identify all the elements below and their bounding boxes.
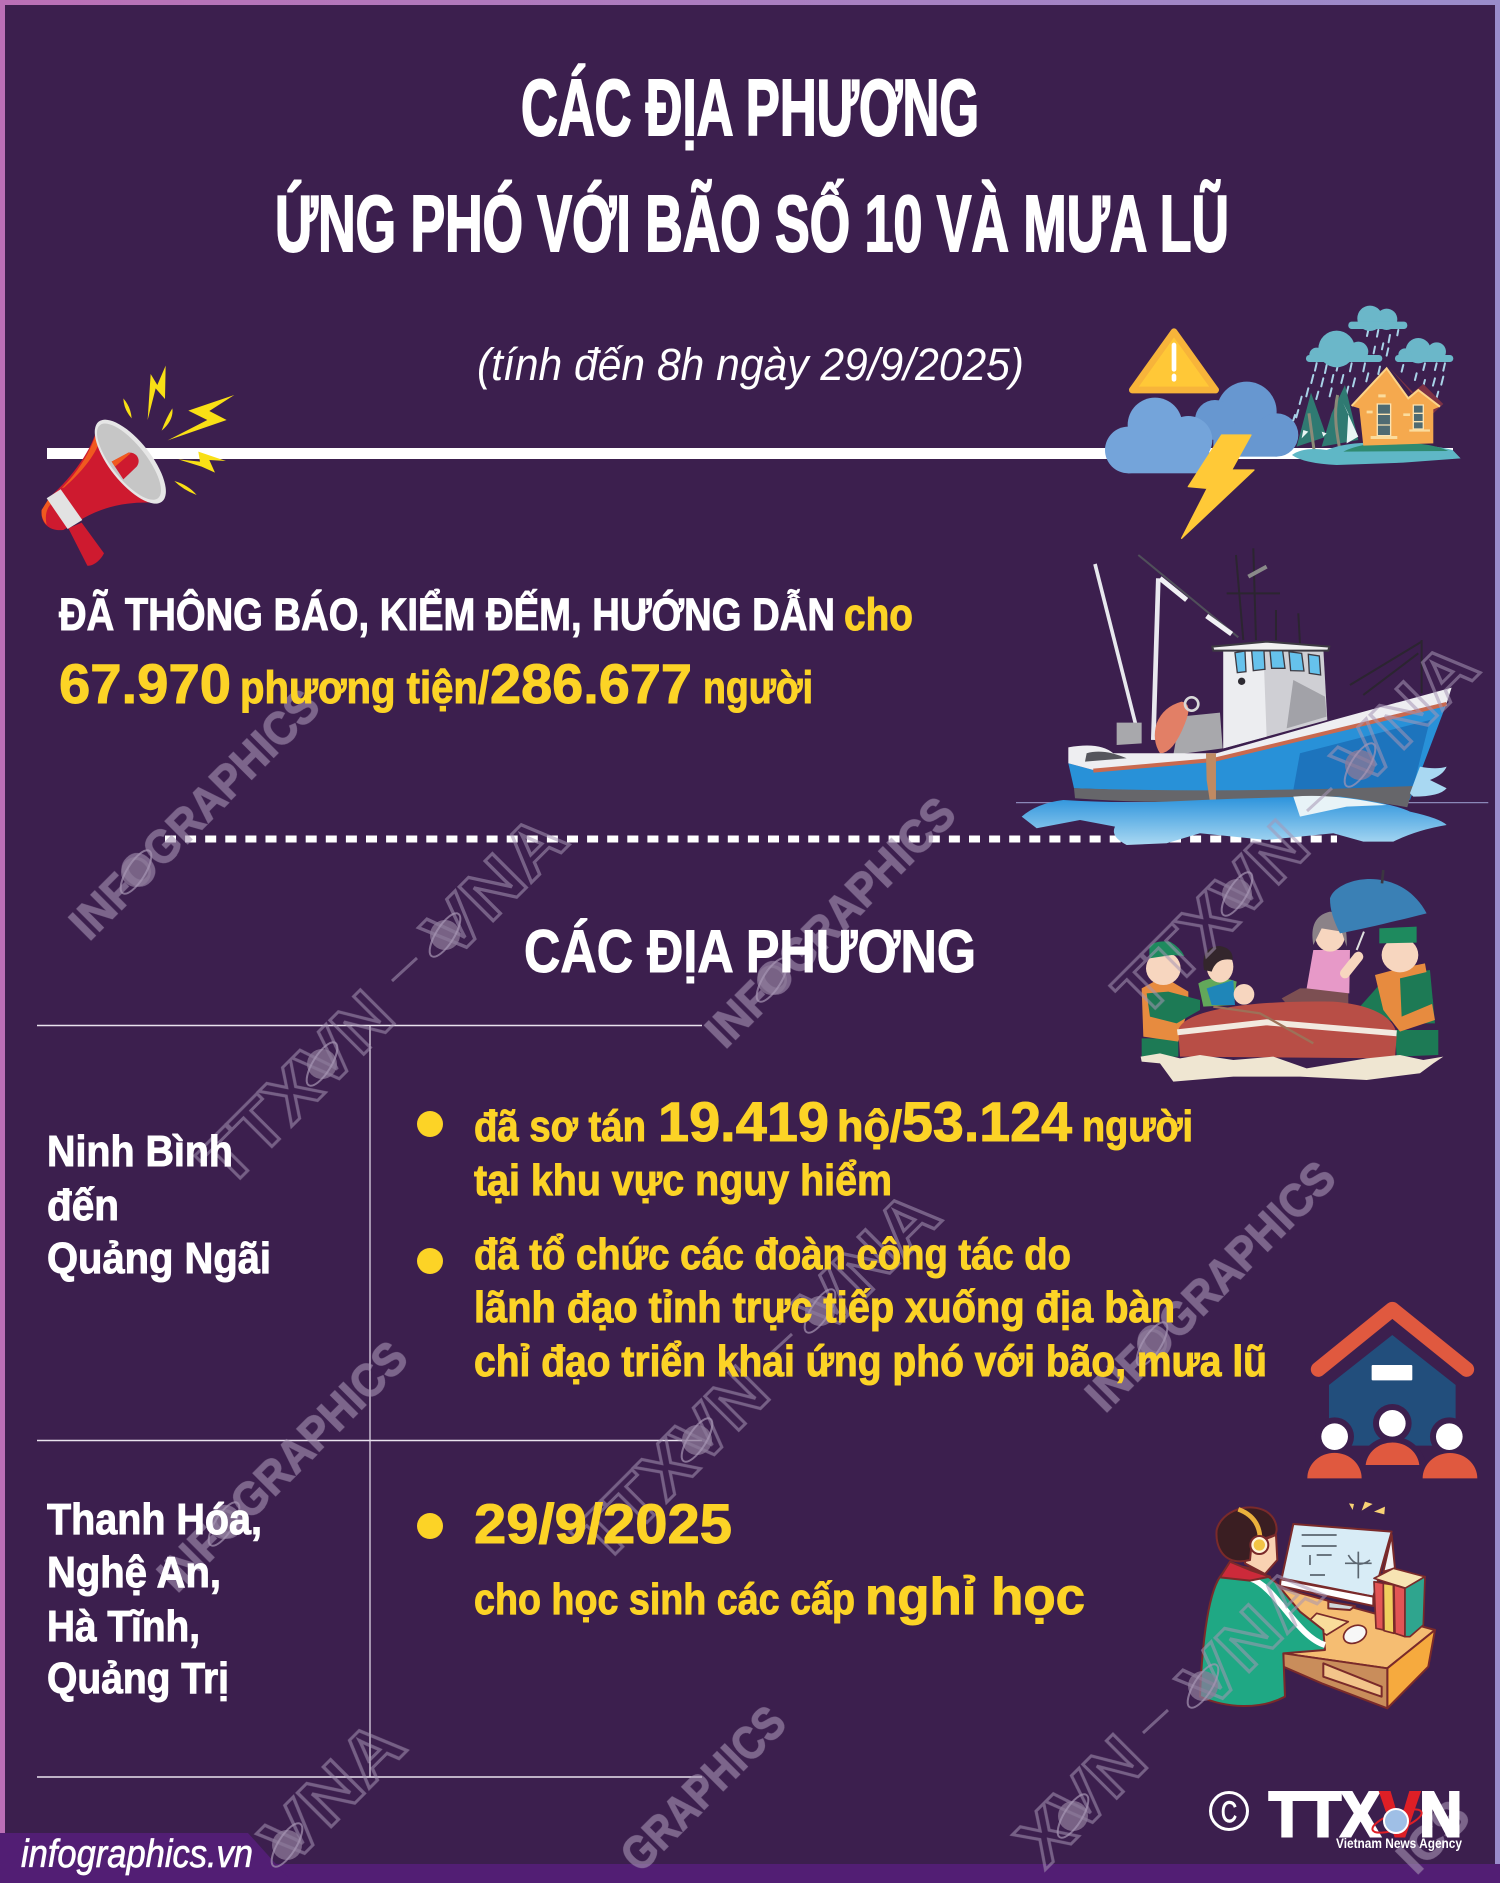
row 2 label: provinces: Hà Tĩnh,: [47, 1602, 200, 1651]
watermark: TTXVN – VNA: VNA: [245, 1705, 419, 1879]
watermark: TTXVN – VNA: TTXVN: [1098, 806, 1323, 1031]
rain clouds: [1306, 306, 1453, 367]
row 2 content: school closure: [417, 1492, 1085, 1626]
bullet: working delegations: chỉ đạo triển khai ứng phó với bão, mưa lũ: [474, 1337, 1267, 1386]
flood foam: [1141, 1053, 1443, 1082]
watermark: TTXVN – VNA: [183, 627, 1492, 1881]
section heading: CÁC ĐỊA PHƯƠNG: [524, 918, 976, 985]
title: [275, 63, 1229, 268]
statistic: vehicles and people notified: cho: [844, 589, 913, 640]
statistic: vehicles and people notified: 67.970: [59, 652, 231, 715]
aft deck and net: [1117, 713, 1223, 755]
formulas on screen: [1302, 1535, 1372, 1578]
illustration: student studying online: [1200, 1502, 1435, 1708]
watermark: TTXVN – VNA: TTXVN: [558, 1352, 783, 1577]
house: [1390, 368, 1443, 413]
row 1 label: Ninh Bình đến Quảng Ngãi: đến: [47, 1181, 119, 1230]
icon: megaphone: [41, 366, 234, 566]
watermark: TTXVN – VNA: TTXVN: [183, 976, 408, 1201]
rain: [1293, 330, 1445, 420]
statistic: vehicles and people notified: ĐÃ THÔNG BÁO, KIỂM ĐẾM, HƯỚNG DẪN: [59, 589, 835, 640]
grandmother: [1282, 912, 1358, 1004]
bullet: working delegations: [417, 1230, 1267, 1386]
clouds: [1105, 382, 1298, 473]
watermark: TTXVN – VNA: XVN: [1000, 1720, 1161, 1881]
lightning bolt: [1182, 435, 1254, 538]
bullet: evacuation: [417, 1090, 1193, 1205]
bullet: working delegations: lãnh đạo tỉnh trực tiếp xuống địa bàn: [474, 1283, 1175, 1332]
watermark globes: [115, 739, 1381, 1871]
icon: evacuation shelter: [1307, 1309, 1477, 1478]
watermark: INFOGRAPHICS: INFOGRAPHICS: [147, 1331, 417, 1601]
row 2 label: provinces: Quảng Trị: [47, 1654, 229, 1703]
masts and rigging: [1095, 548, 1422, 740]
illustration: rescue boat with family: [1141, 870, 1443, 1082]
row 1 label: Ninh Bình đến Quảng Ngãi: Quảng Ngãi: [47, 1234, 271, 1283]
subtitle: date: (tính đến 8h ngày 29/9/2025): [477, 339, 1024, 390]
umbrella: [1330, 870, 1427, 950]
watermark: TTXVN – VNA: VNA: [407, 799, 581, 973]
dotted divider: [165, 836, 1337, 842]
right rescuer: [1360, 927, 1438, 1057]
watermark: TTXVN – VNA: VNA: [1318, 627, 1492, 801]
row 1 label: Ninh Bình đến Quảng Ngãi: [47, 1127, 271, 1283]
row 2 content: school closure: nghỉ học: [865, 1568, 1085, 1626]
trees: [1297, 385, 1358, 447]
watermark: INFOGRAPHICS: GRAPHICS: [610, 1696, 796, 1881]
row 2 label: provinces: [47, 1495, 262, 1703]
logo: TTXVN: C: [1221, 1796, 1237, 1829]
computer monitor: [1280, 1524, 1395, 1610]
title: CÁC ĐỊA PHƯƠNG: [521, 63, 979, 152]
left rescuer: [1142, 941, 1200, 1057]
statistic: vehicles and people notified: người: [703, 662, 813, 713]
bullet: evacuation: 19.419: [658, 1090, 829, 1153]
bullet: evacuation: hộ/: [837, 1102, 902, 1151]
statistic: vehicles and people notified: [59, 589, 913, 715]
statistic: vehicles and people notified: phương tiện/: [240, 662, 489, 713]
row 1 content: [417, 1090, 1267, 1386]
desk: [1277, 1587, 1435, 1708]
bullet: evacuation: 53.124: [902, 1090, 1072, 1153]
watermark: INFOGRAPHICS: ICS: [1386, 1790, 1480, 1883]
water and island: [1292, 442, 1461, 465]
books: [1374, 1568, 1425, 1637]
logo: TTXVN: Vietnam News Agency: [1336, 1835, 1462, 1851]
warning triangle: [1132, 332, 1216, 390]
icon: storm cloud with warning and lightning: [1105, 332, 1298, 538]
white timeline rule: [47, 448, 1453, 459]
icon: house in rain: [1292, 306, 1461, 465]
watermark: INFOGRAPHICS: INFOGRAPHICS: [1075, 1151, 1345, 1421]
illustration: fishing boat: [1016, 548, 1488, 845]
student: [1200, 1507, 1325, 1706]
bullet: evacuation: đã sơ tán: [474, 1102, 646, 1151]
table lines: [37, 1025, 702, 1777]
mouse and notebook: [1307, 1613, 1369, 1647]
spark marks: [1349, 1502, 1385, 1514]
cabin: [1223, 648, 1327, 748]
bullet: evacuation: người: [1082, 1102, 1193, 1151]
bullet: evacuation: tại khu vực nguy hiểm: [474, 1156, 892, 1205]
mother and baby: [1198, 946, 1254, 1007]
row 2 content: school closure: 29/9/2025: [474, 1492, 732, 1555]
horizon line: [1016, 801, 1488, 805]
row 2 content: school closure: cho học sinh các cấp: [474, 1575, 855, 1624]
bullet: working delegations: đã tổ chức các đoàn công tác do: [474, 1230, 1071, 1279]
watermark: TTXVN – VNA: VNA: [1163, 1550, 1337, 1724]
watermark: INFOGRAPHICS: [59, 679, 1480, 1883]
statistic: vehicles and people notified: 286.677: [490, 652, 692, 715]
row 2 label: provinces: Thanh Hóa,: [47, 1495, 262, 1544]
hull: [1068, 703, 1447, 800]
logo: TTXVN: TTXVN: [1269, 1780, 1462, 1850]
red boat: [1177, 1001, 1397, 1058]
watermark: INFOGRAPHICS: INFOGRAPHICS: [695, 787, 965, 1057]
row 2 label: provinces: Nghệ An,: [47, 1548, 221, 1597]
footer site name: infographics.vn: [21, 1833, 253, 1876]
row 1 label: Ninh Bình đến Quảng Ngãi: Ninh Bình: [47, 1127, 233, 1176]
watermark: INFOGRAPHICS: INFOGRAPHICS: [59, 679, 329, 949]
footer tab: infographics.vn background: [0, 1833, 293, 1883]
watermark: TTXVN – VNA: VNA: [780, 1175, 954, 1349]
cabin windows: [1235, 651, 1321, 675]
water splash: [1022, 797, 1447, 845]
